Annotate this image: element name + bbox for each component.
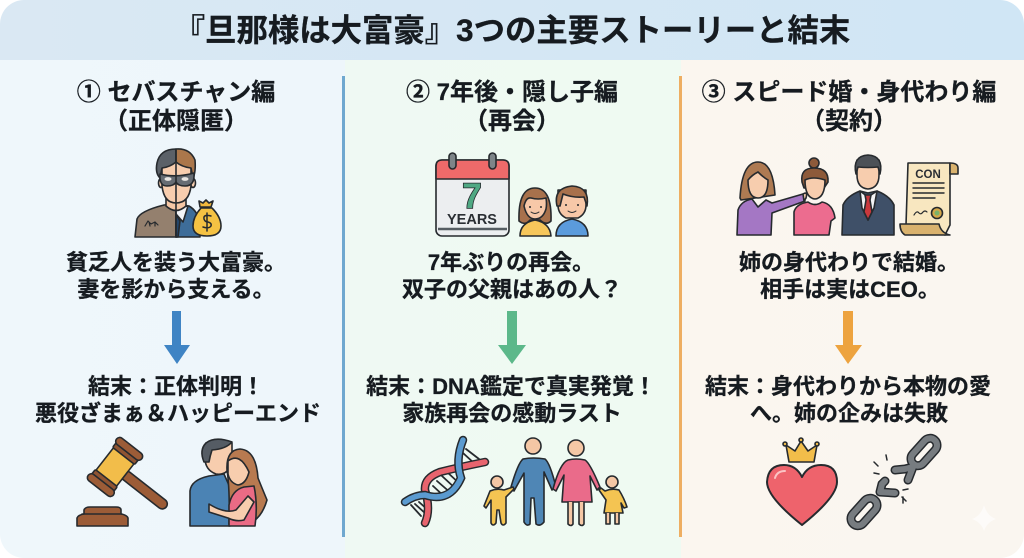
divider: orange <box>679 76 682 537</box>
heading: story 2: ② 7年後・隠し子編 <box>406 79 618 106</box>
icon: broken chain <box>848 435 940 529</box>
icon: boy <box>556 186 588 236</box>
heading: story 1: ① セバスチャン編 <box>77 79 275 106</box>
text: synopsis 1: 貧乏人を装う大富豪。 <box>66 250 286 275</box>
text: ending 2: 家族再会の感動ラスト <box>402 401 622 426</box>
icon: gavel <box>77 436 183 528</box>
icon: calendar 7 years <box>436 153 509 236</box>
text: ending 1 <box>35 374 321 426</box>
icon: contract scroll <box>900 163 958 235</box>
arrow: green <box>498 311 526 364</box>
text: synopsis 2: 7年ぶりの再会。 <box>428 250 594 275</box>
heading: story 1: （正体隠匿） <box>104 108 248 135</box>
heading: story 2 <box>406 79 618 135</box>
heading: story 2: （再会） <box>464 108 560 135</box>
icon: two women <box>737 158 835 235</box>
arrow: blue <box>164 311 190 364</box>
icon: family holding hands <box>484 438 627 526</box>
text: synopsis 3: 姉の身代わりで結婚。 <box>739 250 959 275</box>
heading: story 1 <box>77 79 275 135</box>
text: ending 3: 結末：身代わりから本物の愛 <box>705 374 991 399</box>
text: synopsis 1 <box>66 250 286 302</box>
divider: blue <box>342 76 345 537</box>
arrow: orange <box>835 311 862 364</box>
text: synopsis 1: 妻を影から支える。 <box>77 277 275 302</box>
icon: calendar 7 years: 7 <box>462 177 482 216</box>
text: ending 2 <box>366 374 656 426</box>
heading: story 3 <box>702 79 996 135</box>
text: ending 3 <box>705 374 991 426</box>
text: ending 2: 結末：DNA鑑定で真実発覚！ <box>366 374 656 399</box>
text: ending 3: へ。姉の企みは失敗 <box>750 401 948 426</box>
icon: DNA helix <box>405 440 485 523</box>
heading: story 3: （契約） <box>801 108 897 135</box>
icon: contract scroll: CON <box>915 169 941 181</box>
icon: sparkle watermark <box>972 505 996 531</box>
text: synopsis 3 <box>739 250 959 302</box>
icon: girl <box>519 188 551 236</box>
text: synopsis 3: 相手は実はCEO。 <box>760 277 940 302</box>
icon: disguised man with money bag <box>135 149 221 237</box>
icon: crowned heart <box>767 438 837 525</box>
title: 『旦那様は大富豪』3つの主要ストーリーと結末 <box>174 13 850 48</box>
icon: embracing couple <box>190 439 267 526</box>
heading: story 3: ③ スピード婚・身代わり編 <box>702 79 996 106</box>
panel: story 2 <box>366 79 656 526</box>
icon: man in suit <box>842 155 894 235</box>
text: ending 1: 結末：正体判明！ <box>88 374 264 399</box>
icon: calendar 7 years: YEARS <box>447 212 497 228</box>
text: ending 1: 悪役ざまぁ＆ハッピーエンド <box>35 401 321 426</box>
text: synopsis 2: 双子の父親はあの人？ <box>402 277 622 302</box>
panel: story 3 <box>702 79 996 531</box>
text: synopsis 2 <box>402 250 622 302</box>
panel: story 1 <box>35 79 321 528</box>
